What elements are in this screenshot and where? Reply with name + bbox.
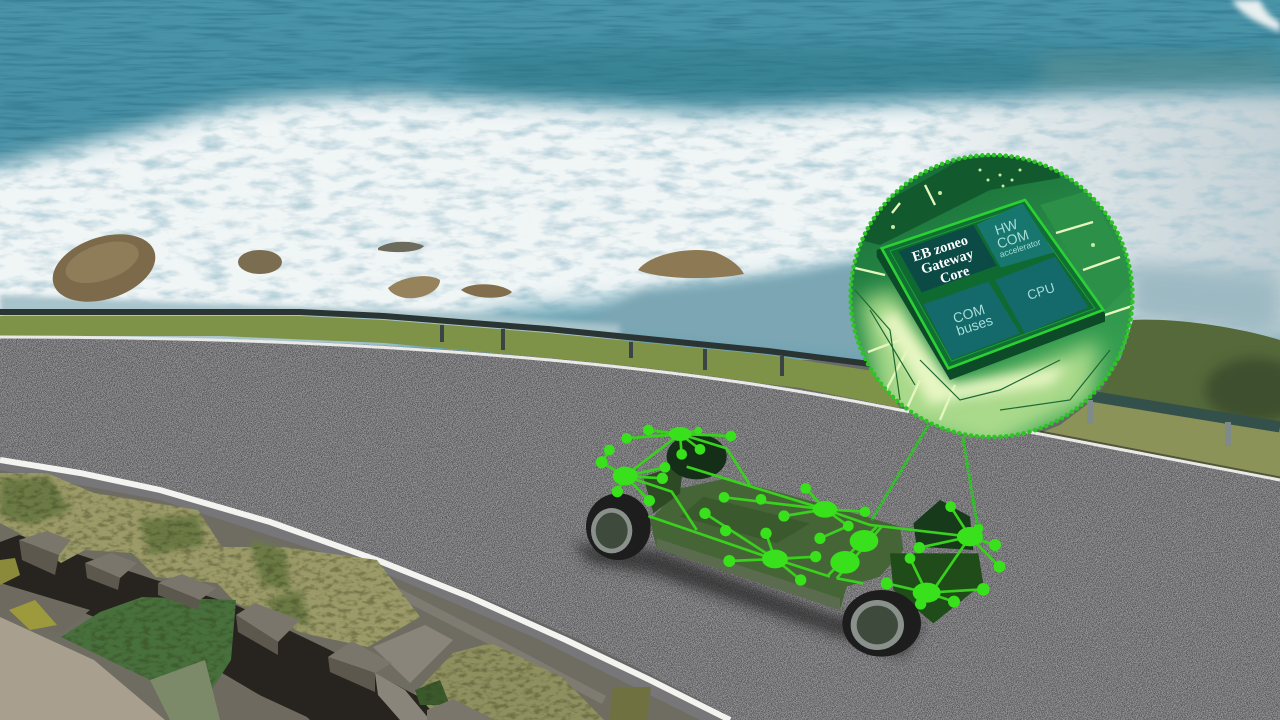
block: CPU xyxy=(995,257,1088,333)
block: HW COM accelerator: accelerator xyxy=(998,237,1042,260)
magnifier disc xyxy=(850,150,1135,450)
block: EB zoneo Gateway Core: Core xyxy=(938,263,971,287)
background: ocean xyxy=(0,0,1280,360)
block: COM buses xyxy=(923,282,1020,359)
block: HW COM accelerator: HW xyxy=(993,215,1020,238)
dark retaining wall xyxy=(0,535,440,720)
retaining wall blocks xyxy=(19,531,495,720)
block: EB zoneo Gateway Core xyxy=(898,225,997,292)
white road edge line xyxy=(0,460,730,720)
small yellow plant xyxy=(9,600,57,630)
curb xyxy=(387,587,604,700)
network nodes xyxy=(596,425,1005,610)
chip body xyxy=(877,200,1105,380)
car shadow xyxy=(573,543,923,657)
callout connector lines xyxy=(872,425,977,525)
roadside grass and bushes xyxy=(0,316,1280,480)
concrete slabs xyxy=(0,583,310,720)
block: COM buses: buses xyxy=(954,312,995,339)
block: COM buses: COM xyxy=(951,301,987,326)
circuit board traces xyxy=(855,150,1135,450)
wheel: rear left xyxy=(586,493,651,560)
chassis platform xyxy=(650,478,903,610)
processor chip xyxy=(877,200,1105,380)
block: HW COM accelerator xyxy=(977,203,1054,268)
embankment xyxy=(0,460,735,720)
connection network xyxy=(602,430,999,604)
leafy plant xyxy=(61,597,236,700)
road xyxy=(0,336,1280,720)
block: EB zoneo Gateway Core: EB zoneo xyxy=(910,232,970,265)
wheel: rear right xyxy=(667,434,727,479)
guardrail xyxy=(0,312,1280,446)
block: CPU: CPU xyxy=(1025,280,1057,303)
grass clumps xyxy=(0,473,651,720)
dotted disc border xyxy=(850,155,1132,437)
block: HW COM accelerator: COM xyxy=(995,226,1031,252)
chip under-glow xyxy=(860,290,1100,450)
surf foam xyxy=(0,70,1280,350)
car chassis xyxy=(573,425,1005,657)
block: EB zoneo Gateway Core: Gateway xyxy=(919,246,976,278)
boulder xyxy=(0,617,165,720)
wheel: front right xyxy=(842,590,921,657)
rocks in surf xyxy=(44,222,744,314)
